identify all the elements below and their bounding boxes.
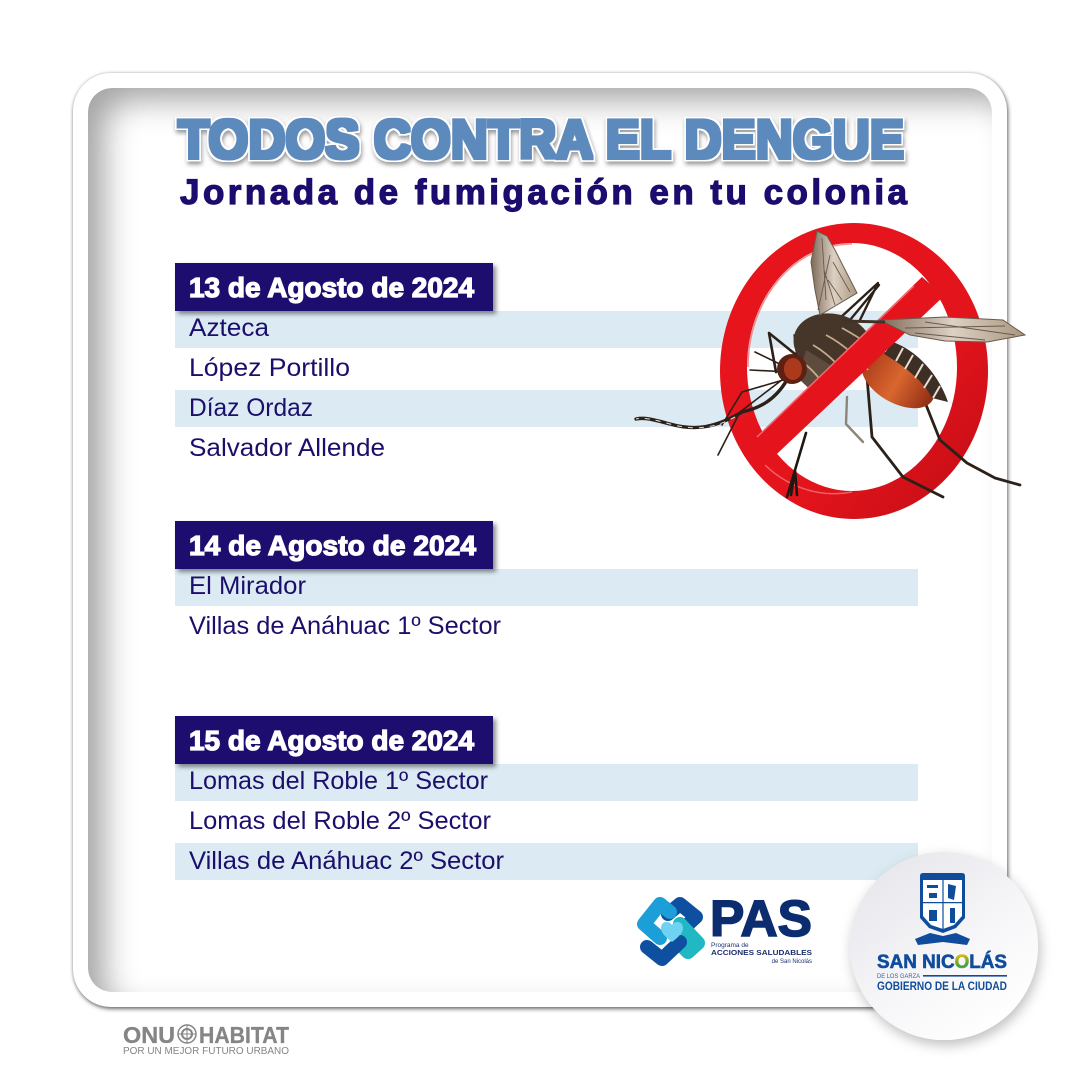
colonias list: El Mirador: [189, 572, 306, 600]
colonias list: Salvador Allende: [189, 434, 385, 462]
prohibition bar: [746, 277, 944, 468]
colonias list: Azteca: [189, 314, 269, 342]
icon: mosquito with prohibition sign: [636, 223, 1025, 519]
row stripe: [175, 569, 918, 606]
de los Garza line: [877, 974, 1007, 980]
mosquito wings: [811, 231, 1025, 342]
Gobierno de la Ciudad: GOBIERNO DE LA CIUDAD: [877, 981, 1007, 993]
row stripes: [175, 764, 918, 880]
badge: San Nicolás de los Garza: [850, 852, 1038, 1040]
UN emblem: [178, 1025, 196, 1043]
date heading: [175, 263, 493, 311]
prohibition ring: [720, 223, 988, 519]
inner panel with grey shading: [88, 88, 992, 992]
PAS caption: [711, 942, 812, 965]
section: 13 de Agosto: [175, 263, 918, 462]
San Nicolás wordmark: SAN NICOLÁS: [877, 951, 1007, 973]
colonias list: Díaz Ordaz: [189, 394, 313, 422]
colonias list: Villas de Anáhuac 1º Sector: [189, 612, 501, 640]
mosquito abdomen: [852, 340, 948, 420]
mosquito head: [777, 354, 807, 384]
colonias list: [189, 572, 501, 640]
colonias list: [189, 314, 385, 462]
colonias list: Lomas del Roble 1º Sector: [189, 767, 488, 795]
mosquito proboscis and palp: [636, 380, 787, 428]
colonias list: Villas de Anáhuac 2º Sector: [189, 847, 504, 875]
date heading: [175, 521, 493, 569]
mosquito thorax: [786, 305, 880, 405]
date heading: 15 de Agosto de 2024: [189, 725, 474, 756]
de los Garza line: DE LOS GARZA: [877, 974, 920, 980]
white rounded card: [73, 73, 1007, 1007]
logo: PAS: [644, 890, 812, 965]
logo: ONU Habitat: [123, 1022, 289, 1057]
mosquito legs behind bar: [718, 283, 1020, 497]
ring highlight: [748, 244, 852, 494]
date heading: 14 de Agosto de 2024: [189, 530, 476, 561]
HABITAT text: HABITAT: [199, 1022, 289, 1048]
date heading: [175, 716, 493, 764]
PAS wordmark: PAS: [710, 890, 812, 947]
PAS caption: ACCIONES SALUDABLES: [711, 948, 812, 957]
colonias list: Lomas del Roble 2º Sector: [189, 807, 491, 835]
PAS caption: de San Nicolás: [772, 959, 812, 965]
badge circle: [850, 852, 1038, 1040]
row stripes: [175, 311, 918, 427]
title: TODOS CONTRA EL DENGUE: [178, 108, 904, 170]
ONU text: ONU: [123, 1022, 175, 1048]
date heading: 13 de Agosto de 2024: [189, 272, 474, 303]
colonias list: López Portillo: [189, 354, 350, 382]
tagline: POR UN MEJOR FUTURO URBANO: [123, 1046, 289, 1057]
PAS caption: Programa de: [711, 942, 749, 949]
PAS symbol: [644, 904, 698, 959]
colonias list: [189, 767, 504, 875]
subtitle: Jornada de fumigación en tu colonia: [180, 173, 908, 212]
coat of arms: [915, 873, 970, 945]
section: 14 de Agosto: [175, 521, 918, 640]
section: 15 de Agosto: [175, 716, 918, 880]
front foreleg over sign: [787, 433, 806, 497]
